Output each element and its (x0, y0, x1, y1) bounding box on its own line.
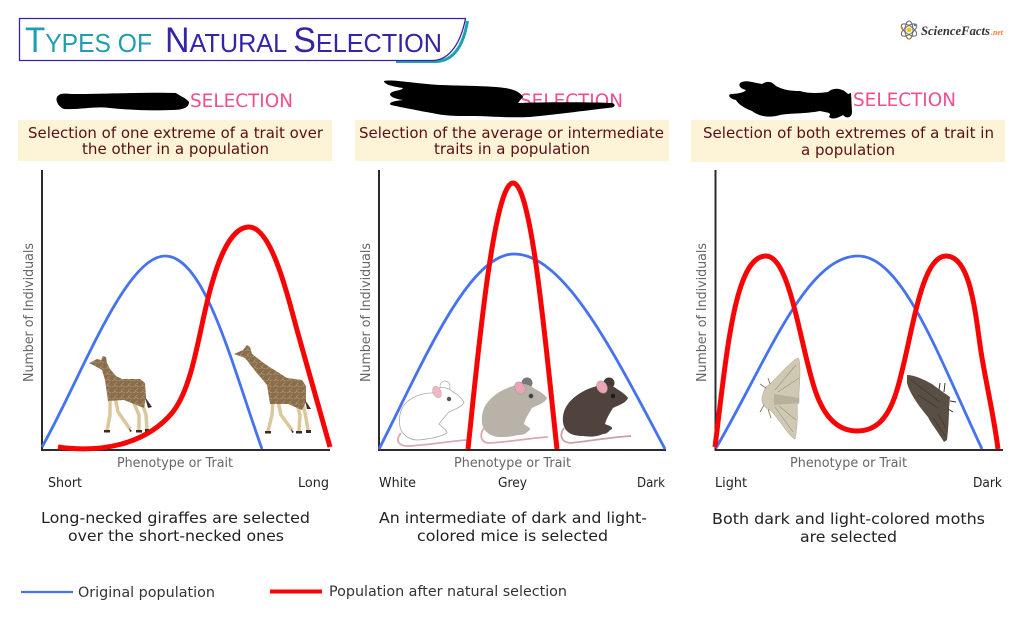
chart: giraffes: Long (298, 476, 329, 491)
icon: short-necked giraffe (89, 356, 152, 432)
panel: disruptive selection (691, 81, 1005, 546)
logo: Science Facts: ScienceFacts (921, 24, 990, 38)
chart: moths (695, 170, 1003, 491)
description box: Selection of one extreme of a trait over (28, 124, 324, 142)
caption (712, 510, 985, 546)
logo: Science Facts (899, 21, 1004, 40)
heading: selection (384, 80, 623, 117)
chart: moths: Dark (973, 476, 1002, 491)
chart: mice: Dark (637, 476, 665, 491)
panel: stabilizing selection (355, 80, 669, 545)
chart: mice: Number of Individuals (359, 243, 374, 382)
chart: giraffes (22, 170, 330, 491)
caption: An intermediate of dark and light- (379, 509, 647, 527)
description box (691, 120, 1005, 162)
legend: Original population (78, 585, 215, 601)
description box: Selection of both extremes of a trait in (703, 124, 994, 142)
description box: a population (801, 141, 895, 159)
chart: mice: Grey (498, 476, 527, 491)
title banner (20, 18, 468, 62)
heading: selection: SELECTION (190, 91, 293, 112)
description box: Selection of the average or intermediate (359, 124, 664, 142)
icon: grey mouse (481, 378, 548, 443)
chart: moths: Phenotype or Trait (790, 456, 907, 471)
caption: colored mice is selected (417, 527, 608, 545)
logo: Science Facts: .net (991, 28, 1004, 37)
icon: dark mouse (561, 378, 631, 443)
description box: the other in a population (82, 140, 269, 158)
icon: long-necked giraffe (234, 345, 311, 434)
panel: directional selection (18, 91, 332, 545)
heading: selection (56, 91, 293, 112)
caption (379, 509, 647, 545)
chart: giraffes: Number of Individuals (22, 243, 37, 382)
caption: Both dark and light-colored moths (712, 510, 985, 528)
heading: selection: SELECTION (853, 90, 956, 111)
icon: light moth (760, 358, 800, 439)
chart: mice: White (379, 476, 416, 491)
chart: mice: Phenotype or Trait (454, 456, 571, 471)
legend (21, 584, 567, 601)
chart: mice (359, 170, 666, 491)
chart: giraffes: Phenotype or Trait (117, 456, 233, 471)
caption: are selected (800, 528, 897, 546)
caption: over the short-necked ones (68, 527, 284, 545)
heading: selection (729, 81, 956, 118)
chart: moths: Light (715, 476, 747, 491)
legend: Population after natural selection (329, 584, 567, 600)
title banner: TYPES OF (25, 21, 152, 60)
description box: traits in a population (434, 140, 590, 158)
icon: dark moth (907, 375, 956, 442)
chart: moths: Number of Individuals (695, 243, 710, 382)
chart: giraffes: Short (48, 476, 82, 491)
caption: Long-necked giraffes are selected (41, 509, 310, 527)
description box (355, 120, 669, 161)
title banner: NATURAL SELECTION (165, 21, 442, 60)
description box (18, 120, 332, 161)
caption (41, 509, 310, 545)
heading: selection: SELECTION (520, 91, 623, 112)
icon: white mouse (398, 381, 467, 446)
